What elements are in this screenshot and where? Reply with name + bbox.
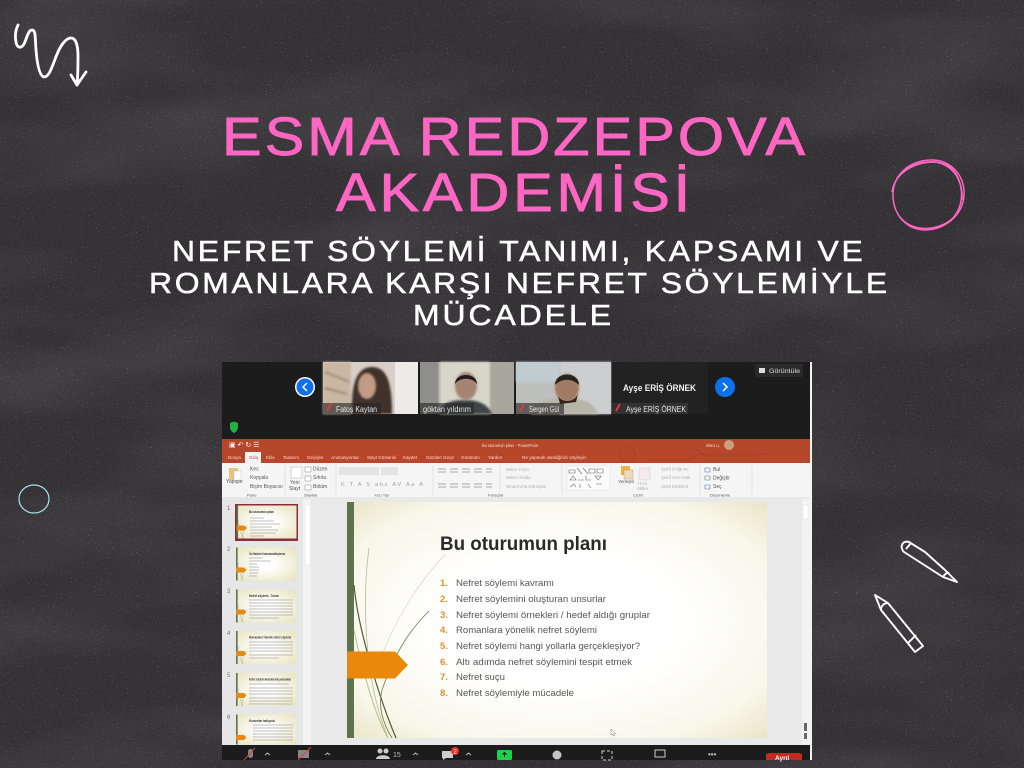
slides group: Slaytlar [304, 492, 318, 498]
title: ESMA REDZEPOVA [222, 107, 805, 167]
thumbnail 3 [236, 590, 296, 622]
icon: squiggle arrow [15, 25, 86, 85]
mouse cursor [611, 729, 616, 736]
slides group: Sıfırla [313, 475, 326, 481]
next button [715, 377, 735, 397]
powerpoint title bar and tabs: Tasarım [283, 455, 299, 460]
participants [376, 748, 401, 759]
agenda list: 5. [440, 641, 448, 652]
slides group: Slayt [289, 486, 301, 492]
thumbnail 6 [236, 714, 296, 744]
slides group: Yeni [290, 480, 300, 486]
powerpoint title bar and tabs: Ekle [266, 455, 275, 460]
agenda list: Nefret söylemi örnekleri / hedef aldığı gruplar [456, 610, 650, 621]
icon: pink hand-drawn circle [892, 160, 964, 230]
editing group [705, 467, 731, 498]
powerpoint title bar and tabs: Bu oturumun planı - PowerPoint [482, 443, 539, 448]
powerpoint title bar and tabs: Görünüm [461, 455, 480, 460]
drawing group: Şekil Ana Hattı [661, 475, 691, 480]
slide thumbnails panel: 3 [227, 589, 231, 595]
thumbnail 4: Romanlara Yönelik nefret söylemi [249, 636, 291, 640]
clipboard group: Kopyala [250, 475, 268, 481]
title [222, 107, 805, 223]
agenda list: 7. [440, 672, 448, 683]
powerpoint title bar and tabs: Geçişler [307, 455, 324, 460]
thumbnail 3: Nefret söylemi - Tanım [249, 594, 279, 598]
slides group: Bölüm [313, 484, 327, 490]
agenda list: Romanlara yönelik nefret söylemi [456, 625, 597, 636]
powerpoint title bar and tabs: Dosya [228, 455, 241, 460]
video tile: göktan yıldırım: göktan yıldırım [423, 405, 471, 414]
screenshot: zoom meeting [222, 362, 812, 762]
icon: pencil [875, 595, 923, 652]
muted microphone [244, 748, 255, 760]
paragraph group [438, 467, 547, 498]
slide thumbnails panel: 1 [227, 506, 231, 512]
agenda list: Nefret suçu [456, 672, 505, 683]
font group: K T A S abc AV Aa A [341, 482, 423, 488]
subtitle: ROMANLARA KARŞI NEFRET SÖYLEMİYLE [149, 266, 887, 300]
clipboard group: Yapıştır [226, 479, 243, 485]
drawing group [567, 466, 691, 498]
video tile: Fatoş Kaytan: Fatoş Kaytan [336, 405, 377, 414]
participants: 15 [393, 752, 401, 759]
thumbnail 5: Nefret söylemi kanunlarında yansımalar [249, 678, 291, 682]
powerpoint title bar and tabs: ▣ ↶ ↻ ☰ [229, 442, 259, 449]
grass decoration [354, 548, 445, 738]
drawing group: Çizim [633, 492, 644, 498]
powerpoint title bar and tabs: Slayt Gösterisi [367, 455, 396, 460]
thumbnail 5 [236, 673, 296, 706]
agenda list [440, 578, 650, 699]
clipboard group: Biçim Boyacısı [250, 484, 283, 490]
paragraph group: Paragraf [488, 492, 504, 498]
drawing group: Stiller [637, 486, 649, 491]
slides group [289, 466, 328, 498]
paragraph group: SmartArt'a Dönüştür [506, 484, 547, 489]
video tile: Sergen Gül [516, 362, 611, 414]
powerpoint title bar and tabs: ebru u. [706, 443, 720, 448]
slides group: Düzen [313, 466, 328, 472]
drawing group: Hızlı [638, 481, 647, 486]
video tile: Ayşe Eriş Örnek: Ayşe ERİŞ ÖRNEK [626, 405, 687, 414]
video tile: göktan yıldırım [420, 362, 514, 414]
thumbnail 2 [236, 548, 296, 580]
thumbnail 1 [235, 504, 298, 541]
drawing group: Yerleştir [618, 479, 635, 484]
agenda list: Nefret söylemi kavramı [456, 578, 554, 589]
meeting toolbar [222, 745, 810, 762]
slide thumbnails panel: 2 [227, 547, 231, 553]
share screen button [497, 750, 512, 760]
agenda list: 2. [440, 594, 448, 605]
powerpoint title bar and tabs: Yardım [488, 455, 502, 460]
editing group: Seç [713, 484, 722, 490]
thumbnail 2: Ön İfadeleri kavramsallaştırma [249, 552, 285, 556]
paragraph group: Metni Hizala [506, 475, 531, 480]
thumbnail 4 [236, 631, 296, 664]
powerpoint title bar and tabs: Kaydet [403, 455, 418, 460]
right scrollbar [802, 499, 810, 745]
paragraph group: Metin Yönü [506, 467, 529, 472]
chat with badge [442, 747, 459, 760]
powerpoint title bar and tabs: Giriş [249, 455, 259, 460]
agenda list: Nefret söylemini oluşturan unsurlar [456, 594, 606, 605]
agenda list: 1. [440, 578, 448, 589]
agenda list: Nefret söylemiyle mücadele [456, 688, 574, 699]
powerpoint title bar and tabs: Ne yapmak istediğinizi söyleyin [522, 455, 587, 460]
clipboard group [226, 466, 283, 498]
leave button: Ayrıl [775, 755, 789, 762]
font group: Yazı Tipi [374, 492, 389, 498]
whiteboard [655, 750, 665, 757]
powerpoint title bar and tabs: Animasyonlar [331, 455, 360, 460]
leave button [766, 753, 802, 762]
icon: pen [902, 542, 957, 582]
thumbnail 6: Konumlar hatlıyıcılı [249, 719, 275, 723]
thumbnail 1: Bu oturumun planı [249, 510, 274, 514]
font group [339, 467, 423, 498]
powerpoint title bar and tabs: Gözden Geçir [426, 455, 455, 460]
subtitle: MÜCADELE [413, 299, 611, 332]
agenda list: Nefret söylemi hangi yollarla gerçekleşiyor? [456, 641, 640, 652]
video tile: Sergen Gül: Sergen Gül [529, 405, 559, 414]
agenda list: 3. [440, 610, 448, 621]
clipboard group: Pano [247, 492, 257, 498]
main slide [347, 502, 767, 738]
video tile: Ayşe Eriş Örnek [612, 362, 708, 414]
powerpoint ribbon [222, 463, 810, 498]
view button [755, 364, 803, 377]
slide thumbnails panel: 5 [227, 673, 231, 679]
video tile: Fatoş Kaytan [323, 362, 418, 414]
video tile: Ayşe Eriş Örnek: Ayşe ERİŞ ÖRNEK [623, 383, 696, 393]
orange arrow [347, 652, 408, 678]
drawing group: Şekil Dolgusu [661, 466, 689, 472]
clipboard group: Kes [250, 466, 259, 472]
agenda list: Altı adımda nefret söylemini tespit etmek [456, 657, 632, 668]
slide thumbnails panel: 4 [227, 631, 231, 637]
editing group: Değiştir [713, 476, 730, 482]
editing group: Bul [713, 467, 720, 473]
slide thumbnails panel [222, 497, 311, 745]
subtitle: NEFRET SÖYLEMİ TANIMI, KAPSAMI VE [172, 234, 863, 268]
drawing group: Şekil Efektleri [661, 484, 688, 489]
meeting top bar [222, 362, 810, 439]
icon: small blue circle [19, 485, 49, 513]
agenda list: 6. [440, 657, 448, 668]
agenda list: 8. [440, 688, 448, 699]
powerpoint title bar and tabs [222, 439, 810, 464]
stopped video [298, 747, 311, 760]
title: AKADEMİSİ [336, 163, 690, 223]
slide heading: Bu oturumun planı [440, 534, 607, 555]
apps [602, 751, 612, 760]
editing group: Düzenleme [710, 492, 731, 498]
more: ••• [708, 750, 717, 759]
reactions [552, 750, 562, 760]
chat with badge: 2 [454, 750, 458, 756]
slide thumbnails panel: 6 [227, 715, 231, 721]
subtitle [149, 234, 887, 332]
slide editor canvas [222, 497, 810, 745]
view button: Görüntüle [769, 368, 800, 375]
security shield [230, 422, 238, 433]
agenda list: 4. [440, 625, 448, 636]
previous button [295, 377, 315, 397]
